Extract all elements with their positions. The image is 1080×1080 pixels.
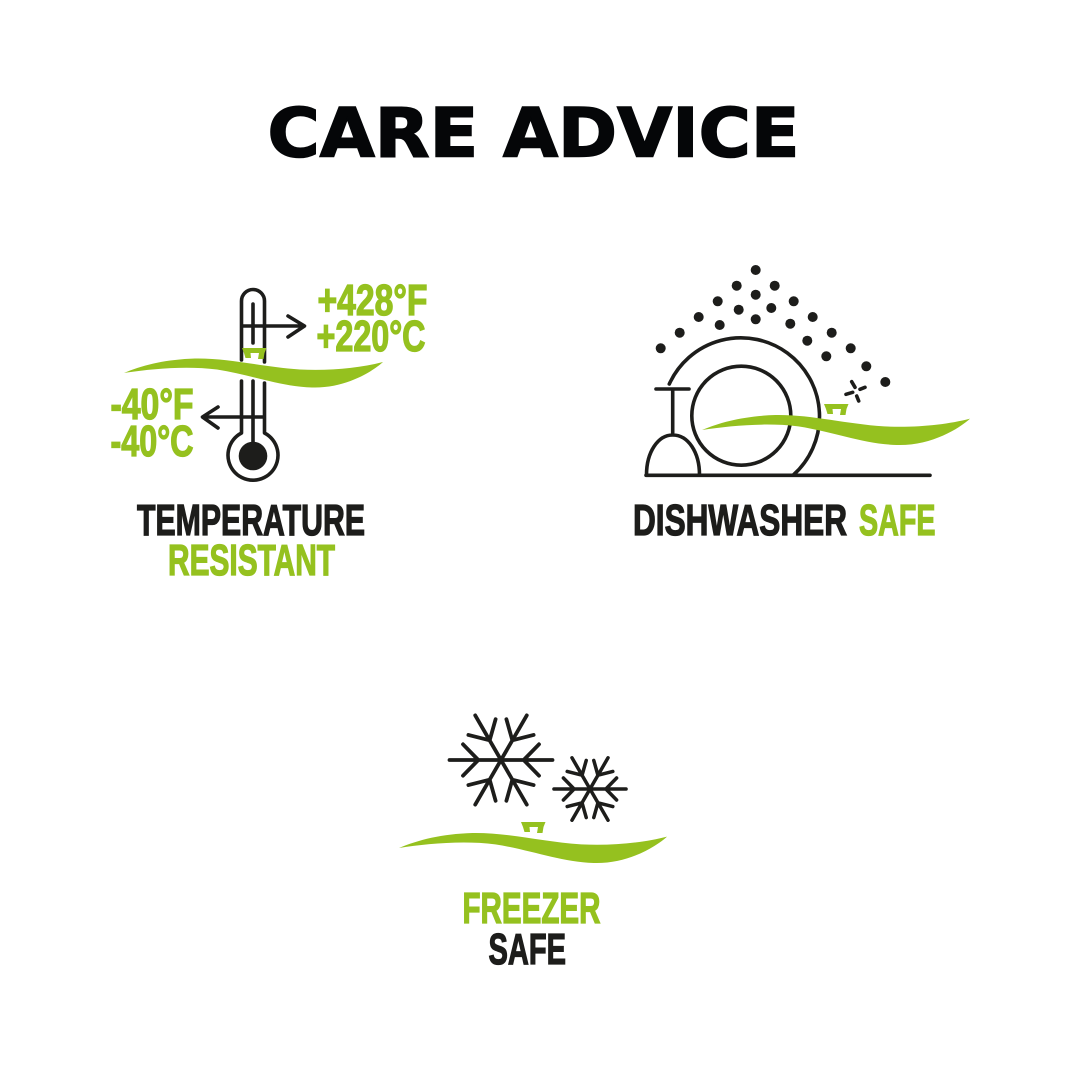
icon: sparkle — [846, 382, 865, 401]
label: temperature resistant: RESISTANT — [168, 537, 335, 585]
icon: large snowflake — [450, 708, 552, 812]
icon: counter line — [646, 473, 930, 477]
text: low temperatures: -40°F — [110, 381, 194, 429]
icon: small snowflake — [554, 752, 626, 826]
icon: water droplets — [656, 265, 890, 387]
panel: temperature resistant — [110, 277, 428, 585]
arrow: upper limit — [242, 316, 304, 337]
text: high temperatures: +428°F — [318, 277, 428, 325]
label: dishwasher safe: SAFE — [859, 497, 936, 545]
label: freezer safe: FREEZER — [462, 885, 600, 933]
label: dishwasher safe: DISHWASHER — [633, 497, 847, 545]
label: freezer safe: SAFE — [488, 926, 566, 974]
swoosh — [702, 415, 970, 445]
icon: green cup mark — [824, 404, 848, 415]
panel: freezer safe — [399, 708, 667, 974]
arrow: lower limit — [202, 407, 264, 428]
swoosh — [399, 833, 667, 863]
text: low temperatures: -40°C — [110, 418, 194, 466]
panel: dishwasher safe — [633, 265, 970, 545]
swoosh — [124, 358, 383, 388]
label: temperature resistant: TEMPERATURE — [137, 497, 365, 545]
label: temperature resistant — [137, 497, 365, 585]
text: high temperatures — [316, 277, 428, 361]
text: low temperatures — [110, 381, 194, 466]
label: freezer safe — [462, 885, 600, 974]
icon: thermometer — [228, 290, 278, 480]
title: CARE ADVICE — [268, 94, 800, 174]
icon: wine glass — [646, 389, 700, 475]
icon: green cup mark — [521, 822, 546, 833]
icon: plate — [669, 338, 820, 475]
text: high temperatures: +220°C — [316, 313, 426, 361]
